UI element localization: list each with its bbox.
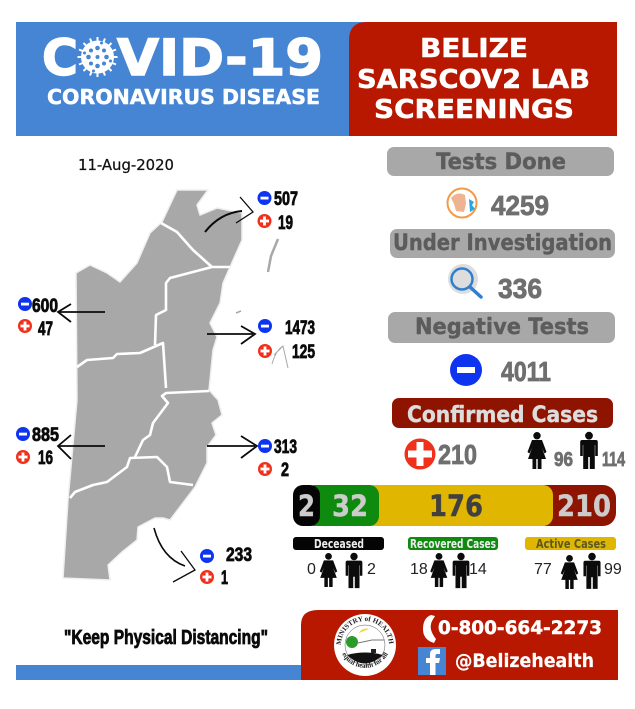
header panel: Belize lab screenings: SARSCOV2 LAB — [357, 65, 590, 95]
district figures: west: 600 — [32, 296, 58, 317]
district figures: south west: 885 — [32, 425, 59, 446]
panel: under investigation — [390, 229, 615, 304]
title: COVID-19 — [42, 29, 323, 87]
district figures: west: 47 — [38, 319, 53, 340]
logo: ministry of health: equal health for all — [342, 652, 388, 668]
arrow: Stann Creek — [207, 436, 257, 458]
status bar: 2 — [298, 489, 315, 523]
icon: minus — [450, 354, 482, 386]
slogan: "Keep Physical Distancing" — [64, 627, 268, 649]
legend: recovered — [408, 537, 498, 588]
district figures: south west — [16, 425, 59, 469]
facebook handle: @Belizehealth — [455, 650, 594, 672]
value: 4259 — [491, 190, 549, 221]
district figures: north — [258, 189, 298, 234]
icon: phone — [423, 615, 436, 643]
icon: swab test — [448, 188, 476, 218]
status bar: 32 — [332, 489, 368, 523]
value: 4011 — [501, 356, 551, 387]
footer blue strip — [16, 665, 306, 680]
title: COVID-19: VID-19 — [117, 29, 323, 87]
arrow: Cayo — [58, 304, 105, 322]
virus icon — [78, 37, 118, 77]
district figures: east: 1473 — [285, 318, 315, 339]
legend: active: Active Cases — [536, 537, 606, 551]
legend: active: 77 — [534, 561, 552, 578]
arrow: Corozal — [205, 197, 253, 232]
date: 11-Aug-2020 — [78, 156, 174, 174]
icon: magnifier — [448, 264, 481, 297]
district figures: south — [200, 545, 252, 589]
district figures: east: 125 — [292, 342, 315, 363]
cayes — [236, 239, 288, 368]
district figures: south east: 313 — [274, 437, 297, 458]
legend: recovered: 14 — [469, 561, 487, 578]
footer contact panel — [301, 610, 618, 680]
panel: confirmed cases — [392, 398, 626, 471]
male count: 114 — [602, 449, 626, 471]
district figures: south west: 16 — [38, 448, 53, 469]
arrow: Toledo — [154, 528, 195, 582]
district figures: east — [258, 318, 315, 363]
district figures: south east: 2 — [281, 460, 289, 481]
district figures: north: 19 — [278, 213, 293, 234]
subtitle: CORONAVIRUS DISEASE — [47, 85, 320, 109]
panel: negative tests — [388, 312, 615, 387]
district figures: south: 1 — [221, 568, 228, 589]
arrow: Belize district — [207, 326, 255, 344]
icon: man — [580, 432, 598, 469]
header panel: Belize lab screenings: SCREENINGS — [374, 95, 574, 125]
legend: deceased — [293, 537, 384, 588]
district figures: north: 507 — [274, 189, 298, 210]
legend: deceased: Deceased — [314, 537, 364, 551]
district figures: south east — [258, 437, 297, 481]
status bar: 210 — [557, 489, 611, 523]
panel: tests done — [387, 147, 614, 221]
status bar: 176 — [429, 489, 483, 523]
map of Belize districts — [63, 190, 288, 580]
icon: plus — [404, 438, 436, 470]
value: 336 — [498, 273, 542, 304]
icon: woman — [528, 432, 546, 469]
arrow: Cayo south — [58, 435, 105, 459]
panel: negative tests: Negative Tests — [415, 315, 589, 340]
logo: ministry of health — [334, 614, 396, 676]
status bar — [293, 485, 616, 526]
panel: tests done: Tests Done — [436, 150, 566, 175]
phone number: 0-800-664-2273 — [438, 617, 602, 639]
panel: confirmed cases: Confirmed Cases — [407, 403, 598, 428]
legend: recovered: 18 — [410, 561, 428, 578]
header panel: Belize lab screenings — [349, 22, 617, 136]
legend: recovered: Recovered Cases — [410, 537, 496, 551]
header panel: COVID-19 — [16, 22, 368, 136]
legend: active — [525, 537, 622, 589]
icon: facebook — [418, 647, 446, 675]
legend: deceased: 0 — [307, 561, 316, 578]
title: COVID-19: C — [42, 29, 78, 87]
female count: 96 — [554, 449, 573, 471]
district figures: south: 233 — [226, 545, 252, 566]
value: 210 — [438, 439, 477, 470]
header panel: Belize lab screenings: BELIZE — [420, 34, 528, 64]
logo: ministry of health: MINISTRY of HEALTH — [336, 616, 394, 645]
panel: under investigation: Under Investigation — [393, 231, 612, 256]
legend: deceased: 2 — [367, 561, 376, 578]
legend: active: 99 — [604, 561, 622, 578]
district figures: west — [18, 296, 58, 340]
